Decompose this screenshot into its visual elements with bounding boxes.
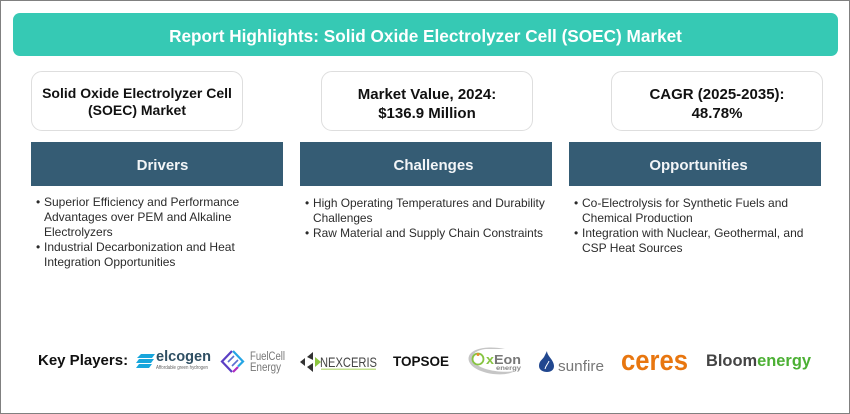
stat card: CAGR: CAGR (2025-2035): <box>649 86 785 103</box>
text block: drivers list: • <box>36 195 40 209</box>
logo: NEXCERIS: NEXCERIS <box>320 354 377 370</box>
text block: opportunities list: • <box>574 196 578 210</box>
stat card: market value <box>321 71 533 131</box>
logo: elcogen: elcogen <box>156 348 211 365</box>
text block: challenges list: High Operating Temperatures and Durability Challenges <box>313 196 545 225</box>
panel heading: challenges <box>300 142 552 186</box>
logo: OxEon energy <box>469 347 522 374</box>
stat card: market value: $136.9 Million <box>378 105 476 122</box>
logo: NEXCERIS <box>300 352 377 372</box>
text block: opportunities list: Co-Electrolysis for Synthetic Fuels and Chemical Production <box>582 196 788 225</box>
text block: drivers list <box>36 195 239 269</box>
panel heading: opportunities <box>568 142 820 186</box>
panel heading: drivers: Drivers <box>137 157 188 174</box>
text block: challenges list: • <box>305 196 309 210</box>
text block: challenges list: Raw Material and Supply Chain Constraints <box>313 226 543 240</box>
text block: opportunities list: • <box>574 226 578 240</box>
logo: FuelCell Energy: FuelCell <box>250 351 285 363</box>
text block: opportunities list: Integration with Nuclear, Geothermal, and CSP Heat Sources <box>582 226 803 255</box>
text block: challenges list: • <box>305 226 309 240</box>
panel heading: challenges: Challenges <box>393 157 474 174</box>
stat card: market name: (SOEC) Market <box>88 102 186 118</box>
title banner <box>13 13 838 56</box>
text block: opportunities list <box>574 196 803 255</box>
key players label: Key Players: <box>38 352 128 369</box>
logo: FuelCell Energy: Energy <box>250 362 281 374</box>
logo: elcogen <box>136 348 211 371</box>
stat card: CAGR <box>611 71 823 131</box>
logo: ceres: ceres <box>621 345 688 377</box>
stat card: CAGR: 48.78% <box>692 105 742 122</box>
title banner: Report Highlights: Solid Oxide Electrolyzer Cell (SOEC) Market <box>169 26 682 46</box>
panel heading: opportunities: Opportunities <box>649 157 748 174</box>
stat card: market name: Solid Oxide Electrolyzer Cell <box>42 85 232 101</box>
text block: drivers list: • <box>36 240 40 254</box>
logo: sunfire <box>539 351 604 375</box>
text block: drivers list: Industrial Decarbonization and Heat Integration Opportunities <box>44 240 235 269</box>
logo: OxEon energy: xEon <box>486 352 521 367</box>
logo: FuelCell Energy <box>222 351 285 374</box>
logo: OxEon energy: energy <box>496 366 522 372</box>
logo: Bloomenergy: Bloomenergy <box>706 351 812 370</box>
logo: elcogen: Affordable green hydrogen <box>156 365 208 371</box>
stat card: market name <box>31 71 243 131</box>
logo: sunfire: sunfire <box>558 358 604 375</box>
panel heading: drivers <box>31 142 283 186</box>
stat card: market value: Market Value, 2024: <box>358 86 496 103</box>
text block: challenges list <box>305 196 545 240</box>
logo: TOPSOE: TOPSOE <box>393 353 449 369</box>
text block: drivers list: Superior Efficiency and Performance Advantages over PEM and Alkaline Electrolyzers <box>44 195 239 239</box>
